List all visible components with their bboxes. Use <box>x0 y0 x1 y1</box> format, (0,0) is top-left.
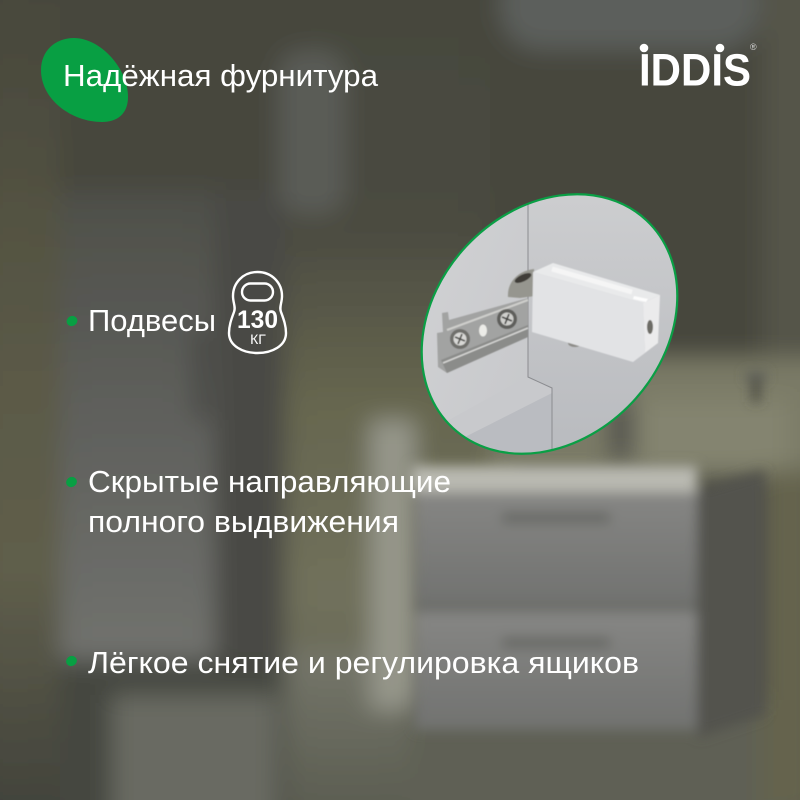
photo green outline <box>369 142 730 506</box>
bullet: hidden runners <box>64 464 451 539</box>
pin under bracket <box>568 342 579 348</box>
mounting plate <box>437 298 528 373</box>
icon: kettlebell 130 kg <box>229 272 286 353</box>
bullet marker <box>65 314 79 328</box>
vanity unit <box>412 372 767 738</box>
bullet marker <box>64 654 79 668</box>
icon: kettlebell 130 kg: КГ <box>250 331 266 347</box>
label: Лёгкое снятие и регулировка ящиков <box>88 645 639 680</box>
bullet: hidden runners: полного выдвижения <box>88 504 399 539</box>
photo: hinge hardware close-up <box>420 193 678 455</box>
bracket face <box>532 272 645 362</box>
bullet: hangers <box>65 303 216 338</box>
title: Надёжная фурнитура <box>63 58 379 93</box>
logo: IDDIS: IDDIS <box>639 44 751 96</box>
label: Скрытые направляющие <box>88 464 451 499</box>
screw left <box>450 329 470 349</box>
screw right <box>497 309 517 329</box>
bracket end <box>640 295 660 357</box>
icon: kettlebell 130 kg: 130 <box>237 306 278 334</box>
logo: IDDIS: ® <box>750 42 757 52</box>
hook <box>508 269 535 298</box>
mounting hole <box>479 324 487 336</box>
bullet marker <box>64 475 79 489</box>
green blob behind title <box>41 38 128 122</box>
label: Подвесы <box>88 303 216 338</box>
bullet: drawer removal <box>64 645 639 680</box>
bracket top <box>533 263 660 303</box>
